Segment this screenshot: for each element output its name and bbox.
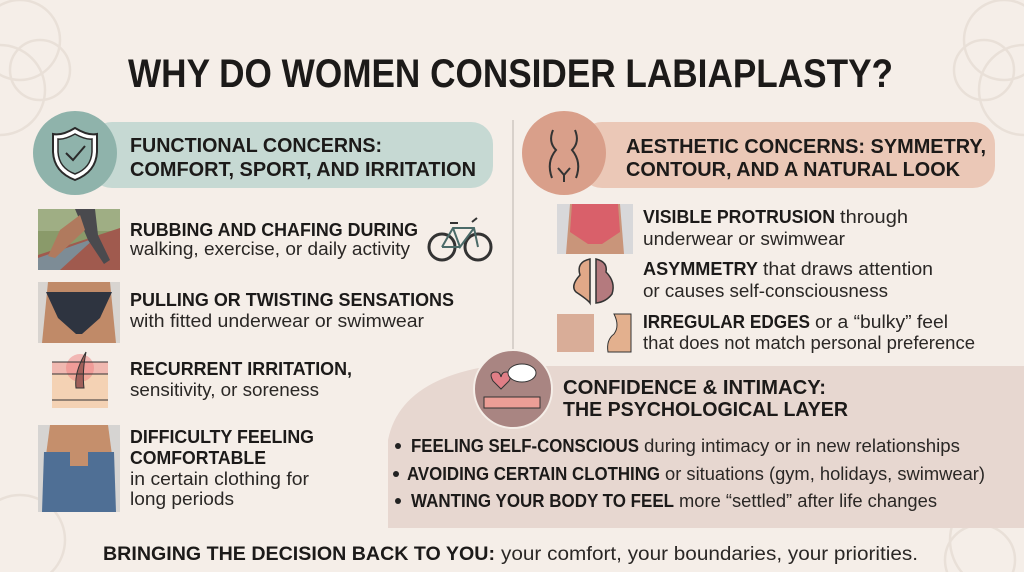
footer: BRINGING THE DECISION BACK TO YOU: <box>103 544 495 565</box>
icon: asymmetric shapes <box>574 259 613 303</box>
item: rubbing and chafing: walking, exercise, or daily activity <box>129 239 410 259</box>
title: WHY DO WOMEN CONSIDER LABIAPLASTY? <box>128 52 893 96</box>
header: functional concerns: COMFORT, SPORT, AND IRRITATION <box>130 159 476 181</box>
item: pulling or twisting: PULLING OR TWISTING SENSATIONS <box>130 290 454 310</box>
item: recurrent irritation: sensitivity, or soreness <box>130 380 319 400</box>
item: irregular edges <box>557 312 975 353</box>
icon: body silhouette <box>522 111 606 195</box>
icon: bicycle <box>429 218 491 260</box>
item: difficulty feeling comfortable: long periods <box>130 489 234 509</box>
panel: confidence & intimacy <box>388 350 1024 528</box>
image: underwear <box>38 282 120 343</box>
bullet list: or situations (gym, holidays, swimwear) <box>665 464 985 484</box>
header: functional concerns <box>33 111 493 195</box>
image: running legs <box>38 209 120 270</box>
header: aesthetic concerns: AESTHETIC CONCERNS: SYMMETRY, <box>626 136 986 158</box>
footer <box>103 544 918 565</box>
image: jeans <box>38 425 120 512</box>
item: difficulty feeling comfortable <box>38 425 314 512</box>
header: aesthetic concerns <box>522 111 995 195</box>
item: rubbing and chafing: RUBBING AND CHAFING DURING <box>130 220 418 240</box>
header: functional concerns: FUNCTIONAL CONCERNS: <box>130 135 382 157</box>
item: asymmetry <box>574 259 933 303</box>
item: difficulty feeling comfortable: COMFORTABLE <box>130 448 266 468</box>
bullet list: FEELING SELF-CONSCIOUS <box>411 436 639 456</box>
item: visible protrusion: through <box>840 207 908 227</box>
item: rubbing and chafing <box>38 209 491 270</box>
footer: your comfort, your boundaries, your priorities. <box>501 544 918 565</box>
item: difficulty feeling comfortable: in certain clothing for <box>130 469 309 489</box>
item: irregular edges: that does not match personal preference <box>643 333 975 353</box>
header: aesthetic concerns: CONTOUR, AND A NATURAL LOOK <box>626 159 961 181</box>
panel: confidence & intimacy: THE PSYCHOLOGICAL LAYER <box>563 399 849 421</box>
item: asymmetry: that draws attention <box>763 259 933 279</box>
item: irregular edges: IRREGULAR EDGES <box>643 312 810 332</box>
item: pulling or twisting <box>38 282 454 343</box>
item: visible protrusion <box>557 204 908 254</box>
item: irregular edges: or a “bulky” feel <box>815 312 948 332</box>
panel: confidence & intimacy: CONFIDENCE & INTIMACY: <box>563 377 826 399</box>
item: difficulty feeling comfortable: DIFFICULTY FEELING <box>130 427 314 447</box>
bullet list: during intimacy or in new relationships <box>644 436 960 456</box>
item: visible protrusion: underwear or swimwear <box>643 229 845 249</box>
icon: skin irritation <box>52 352 108 408</box>
icon: texture and edge <box>557 314 631 352</box>
item: pulling or twisting: with fitted underwear or swimwear <box>129 311 424 331</box>
bullet list <box>393 436 985 511</box>
item: asymmetry: ASYMMETRY <box>643 259 758 279</box>
bullet list: more “settled” after life changes <box>679 491 937 511</box>
bullet list: WANTING YOUR BODY TO FEEL <box>411 491 674 511</box>
icon: shield <box>33 111 117 195</box>
item: recurrent irritation <box>52 352 352 408</box>
bullet list: AVOIDING CERTAIN CLOTHING <box>407 464 660 484</box>
item: visible protrusion: VISIBLE PROTRUSION <box>643 207 835 227</box>
icon: heart and thought <box>474 350 552 428</box>
item: asymmetry: or causes self-consciousness <box>643 281 888 301</box>
item: recurrent irritation: RECURRENT IRRITATION, <box>130 359 352 379</box>
image: swimsuit <box>557 204 633 254</box>
